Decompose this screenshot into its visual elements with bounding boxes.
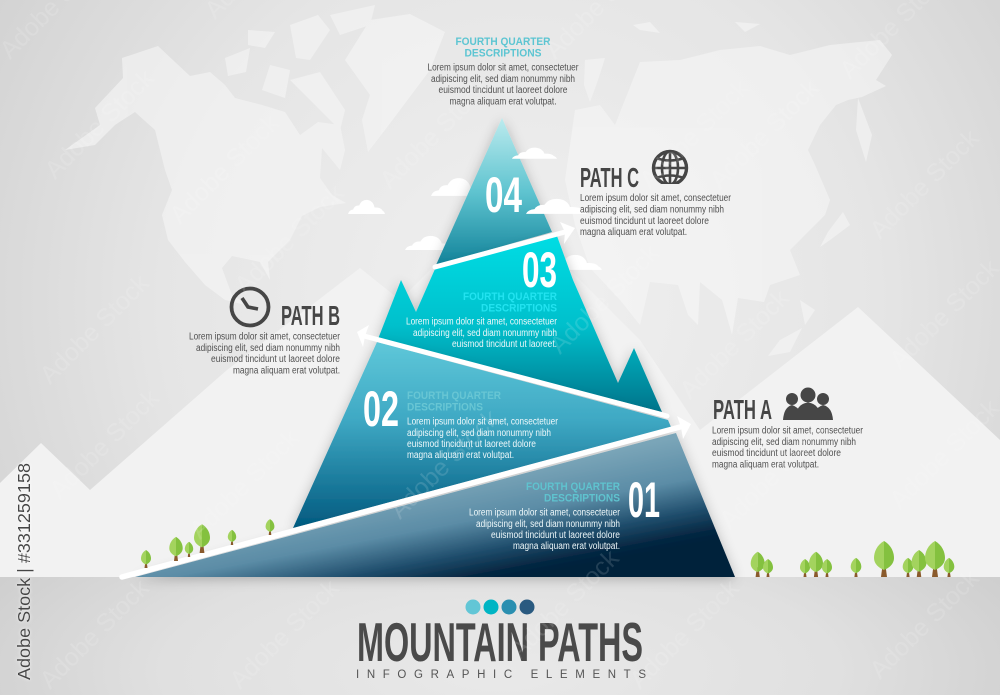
text block: path B: euismod tincidunt ut laoreet dolore	[211, 354, 340, 365]
watermarks: Adobe Stock	[634, 74, 755, 194]
arrow: path B	[357, 325, 667, 416]
text block: path A: euismod tincidunt ut laoreet dolore	[712, 448, 841, 459]
text block: section 01: euismod tincidunt ut laoreet dolore	[491, 530, 620, 541]
text block: path C	[580, 193, 732, 238]
watermarks: Adobe Stock	[34, 269, 155, 389]
text block: section 01: adipiscing elit, sed diam nonummy nibh	[476, 519, 620, 530]
text block: path A: magna aliquam erat volutpat.	[712, 460, 819, 470]
stock id label: Adobe Stock | #331259158	[14, 463, 34, 680]
watermarks: Adobe Stock	[44, 384, 165, 504]
text block: section 02: Lorem ipsum dolor sit amet, consectetuer	[407, 416, 559, 428]
text block: path B: adipiscing elit, sed diam nonummy nibh	[196, 343, 340, 354]
watermarks: Adobe Stock	[674, 284, 795, 404]
text block: section 02	[407, 390, 559, 461]
section 03	[378, 236, 662, 412]
text block: section 01: DESCRIPTIONS	[544, 492, 620, 504]
text block: path B: Lorem ipsum dolor sit amet, consectetuer	[189, 332, 341, 342]
text block: path A	[712, 426, 864, 470]
text block: path A: adipiscing elit, sed diam nonummy nibh	[712, 437, 856, 448]
watermarks: Adobe Stock	[34, 574, 155, 694]
text block: section 02: magna aliquam erat volutpat.	[407, 450, 514, 461]
text block: section 01: magna aliquam erat volutpat.	[513, 541, 620, 552]
trees on ground	[751, 541, 954, 577]
section 01	[135, 433, 735, 577]
trees on slope	[141, 519, 274, 568]
section 02	[293, 342, 671, 528]
main mountain infographic	[135, 118, 735, 577]
watermarks: Adobe Stock	[704, 74, 825, 194]
text block: section 02: euismod tincidunt ut laoreet dolore	[407, 439, 536, 450]
number 01: 01	[628, 472, 660, 528]
ground	[0, 577, 1000, 695]
subtitle: INFOGRAPHIC ELEMENTS	[356, 669, 646, 681]
section 04 peak	[436, 118, 552, 265]
text block: section 03: FOURTH QUARTER	[463, 291, 557, 303]
clouds behind the mountain	[348, 178, 602, 270]
text block: path C: adipiscing elit, sed diam nonummy nibh	[580, 204, 724, 216]
watermarks: Adobe Stock	[864, 564, 985, 684]
watermarks: Adobe Stock	[374, 74, 495, 194]
text block: path C: euismod tincidunt ut laoreet dolore	[580, 216, 709, 227]
icon: clock	[232, 288, 268, 326]
watermarks: Adobe Stock	[624, 574, 745, 694]
watermarks: Adobe Stock	[864, 124, 985, 244]
watermarks: Adobe Stock	[504, 544, 625, 664]
heading: path C: PATH C	[580, 162, 639, 193]
text block: top description: euismod tincidunt ut laoreet dolore	[438, 85, 568, 96]
text block: section 03: euismod tincidunt ut laoreet.	[452, 339, 557, 350]
text block: section 02: adipiscing elit, sed diam nonummy nibh	[407, 428, 551, 439]
icon: people	[783, 388, 833, 420]
text block: path B	[189, 332, 341, 376]
number 02: 02	[363, 381, 399, 437]
text block: path A: Lorem ipsum dolor sit amet, consectetuer	[712, 426, 864, 436]
text block: top description	[428, 36, 579, 108]
watermarks: Adobe Stock	[39, 64, 160, 184]
watermarks: Adobe Stock	[229, 179, 350, 299]
text block: section 02: FOURTH QUARTER	[407, 390, 501, 402]
text block: section 03: adipiscing elit, sed diam nonummy nibh	[413, 328, 557, 339]
arrow: path C	[435, 222, 575, 267]
text block: path C: magna aliquam erat volutpat.	[580, 227, 687, 238]
text block: section 01: FOURTH QUARTER	[526, 481, 620, 493]
clouds in front of the mountain	[512, 148, 587, 214]
text block: top description: FOURTH QUARTER	[456, 36, 551, 48]
palette dots	[466, 600, 534, 614]
text block: section 01: Lorem ipsum dolor sit amet, consectetuer	[469, 508, 621, 518]
text block: top description: DESCRIPTIONS	[464, 48, 542, 60]
number 04: 04	[485, 167, 522, 223]
watermarks: Adobe Stock	[544, 239, 665, 359]
watermarks: Adobe Stock	[224, 574, 345, 694]
world map	[65, 5, 892, 356]
watermarks: Adobe Stock	[384, 404, 505, 524]
text block: section 03: Lorem ipsum dolor sit amet, consectetuer	[406, 316, 558, 328]
text block: section 03: DESCRIPTIONS	[481, 302, 557, 314]
arrow: path A	[122, 416, 691, 577]
text block: section 02: DESCRIPTIONS	[407, 402, 483, 414]
text block: top description: Lorem ipsum dolor sit amet, consectetuer	[428, 62, 579, 74]
watermarks: Adobe Stock	[714, 414, 835, 534]
watermarks: Adobe Stock	[184, 424, 305, 544]
heading: path B: PATH B	[281, 300, 340, 331]
text block: path C: Lorem ipsum dolor sit amet, consectetuer	[580, 193, 732, 204]
number 03: 03	[522, 242, 557, 298]
text block: top description: magna aliquam erat volutpat.	[450, 96, 556, 108]
text block: section 03	[406, 291, 558, 350]
heading: path A: PATH A	[713, 394, 772, 425]
icon: globe	[653, 151, 687, 185]
text block: top description: adipiscing elit, sed diam nonummy nibh	[431, 74, 575, 85]
title: MOUNTAIN PATHS	[357, 611, 643, 673]
text block: path B: magna aliquam erat volutpat.	[233, 366, 340, 376]
watermarks: Adobe Stock	[164, 109, 285, 229]
background mountains	[0, 200, 1000, 577]
text block: section 01	[469, 481, 621, 552]
